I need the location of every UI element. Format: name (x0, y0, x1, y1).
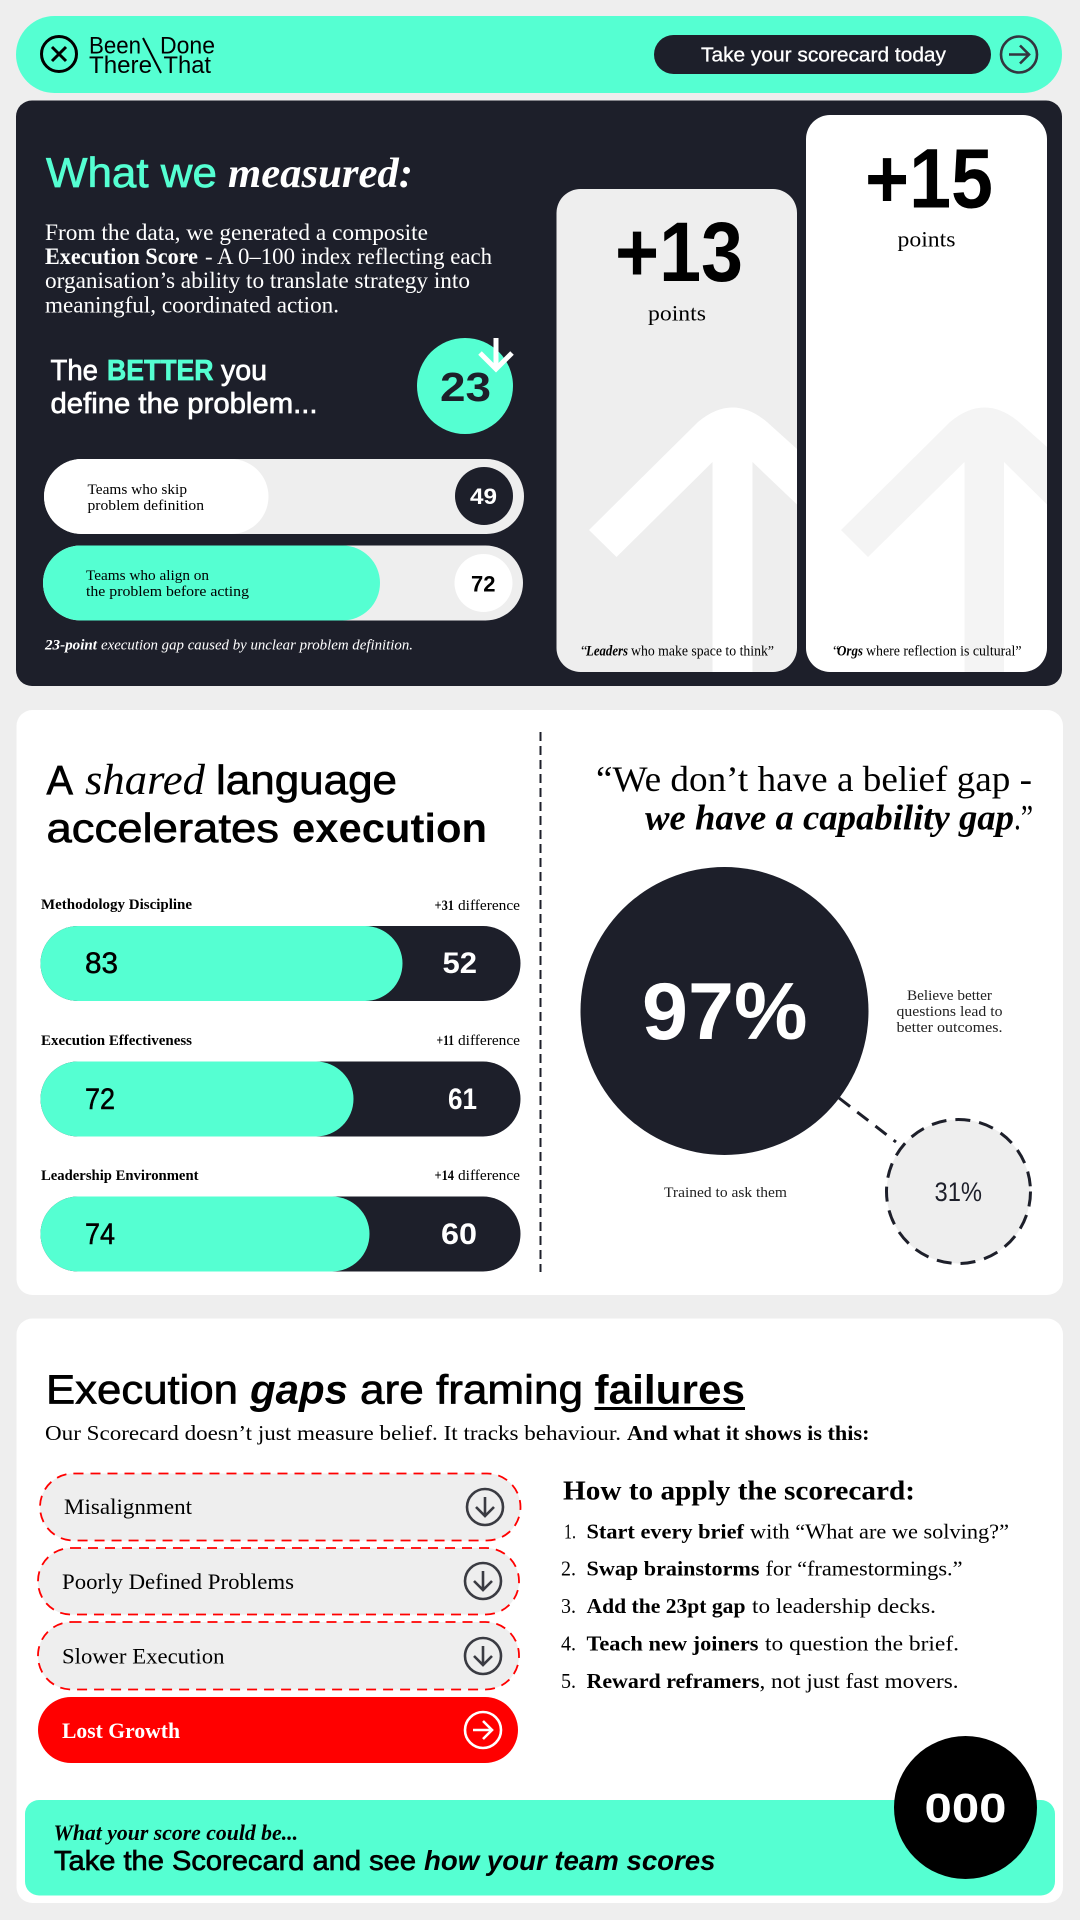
list: how to apply steps: Start every brief (586, 1520, 745, 1544)
caption: believe better questions (896, 988, 1002, 1036)
heading: execution gaps are framing failures (46, 1366, 745, 1412)
bar: teams who skip problem definition: 49 (470, 484, 497, 509)
heading: what we measured: What we (46, 149, 217, 196)
heading: how to apply the scorecard: How to apply the scorecard: (563, 1476, 915, 1506)
score badge: 000: 000 (924, 1785, 1006, 1831)
bar: teams who skip problem definition (44, 459, 524, 534)
caption: orgs: “ (833, 644, 839, 660)
logo wordmark: Been (89, 32, 141, 60)
text block: execution score description: organisation’s ability to translate strategy into (45, 268, 470, 293)
chart: leadership environment: difference (458, 1168, 520, 1184)
icon: down arrow (480, 338, 512, 369)
list: how to apply steps: , not just fast movers. (760, 1669, 958, 1693)
text block: scorecard intro (45, 1421, 870, 1445)
bar: teams who skip problem definition: Teams who skip (88, 482, 187, 498)
heading: execution gaps are framing failures: Execution (46, 1366, 238, 1412)
chart: execution effectiveness: difference (458, 1033, 520, 1049)
pill: poorly defined problems: Poorly Defined Problems (62, 1569, 294, 1594)
quote: belief gap vs capability gap: .” (1014, 798, 1033, 838)
icon: up arrow watermark (841, 408, 1047, 672)
caption: believe better questions: better outcomes. (896, 1020, 1002, 1036)
caption: leaders: Leaders (585, 644, 628, 660)
icon: logo cross circle (42, 36, 76, 72)
stat circle: 97 percent: 97% (642, 967, 808, 1057)
chart: methodology discipline: 83 (85, 947, 118, 980)
heading: a shared language accelerates execution: accelerates (46, 805, 279, 851)
logo wordmark: There (89, 52, 152, 79)
heading: a shared language accelerates execution: A (46, 757, 74, 803)
stat circle: 31 percent (886, 1120, 1030, 1264)
text block: execution score description: From the data, we generated a composite (45, 220, 428, 245)
card: leaders plus 13 points (556, 189, 797, 672)
pill: slower execution: Slower Execution (62, 1644, 225, 1668)
icon: right arrow circle (465, 1712, 501, 1748)
panel: what we measured (16, 100, 1062, 686)
pill: misalignment: Misalignment (64, 1494, 192, 1519)
list: how to apply steps: Teach new joiners (586, 1632, 758, 1656)
button: take your scorecard (654, 35, 991, 74)
icon: header arrow (1001, 36, 1037, 72)
list: how to apply steps: Add the 23pt gap (586, 1594, 746, 1618)
icon: down arrow circle (465, 1563, 501, 1599)
chart: execution effectiveness: Execution Effectiveness (41, 1033, 192, 1049)
caption: orgs: Orgs (837, 644, 863, 660)
subheading: the better you define the problem (50, 355, 318, 420)
bar: teams who align on the problem: the problem before acting (86, 584, 250, 600)
list: how to apply steps: for “framestormings.” (766, 1556, 962, 1580)
heading: a shared language accelerates execution: execution (292, 805, 487, 851)
quote: belief gap vs capability gap: we have a capability gap (645, 798, 1014, 838)
chart: methodology discipline: difference (458, 898, 520, 914)
header bar (16, 16, 1062, 93)
icon: down arrow circle (467, 1489, 503, 1525)
stat circle: 31 percent: 31% (934, 1177, 982, 1207)
heading: what we measured: measured: (228, 151, 413, 197)
stat circle: 97 percent (580, 867, 868, 1155)
subheading: the better you define the problem: you (221, 355, 267, 387)
card: orgs plus 15 points: +15 (865, 132, 993, 226)
list: how to apply steps: to question the brief. (765, 1632, 959, 1656)
caption: orgs: where reflection is cultural” (866, 644, 1022, 660)
list: how to apply steps: Swap brainstorms (586, 1556, 760, 1580)
call to action band: What your score could be... (54, 1820, 298, 1845)
quote: belief gap vs capability gap: “We don’t have a belief gap - (596, 759, 1032, 799)
list: how to apply steps: 1. (564, 1520, 576, 1544)
text block: execution score description: Execution Score (45, 244, 198, 269)
pill: slower execution (38, 1622, 519, 1690)
list: how to apply steps (561, 1520, 1009, 1693)
bar: teams who skip problem definition: problem definition (88, 498, 205, 514)
chart: execution effectiveness: 72 (85, 1083, 115, 1116)
logo wordmark: That (164, 52, 211, 79)
pill: lost growth: Lost Growth (62, 1718, 180, 1743)
pill: poorly defined problems (38, 1548, 519, 1614)
call to action band: how your team scores (424, 1845, 716, 1876)
connector line (839, 1098, 896, 1142)
quote: belief gap vs capability gap (596, 759, 1033, 838)
list: how to apply steps: 2. (561, 1556, 576, 1580)
pill: misalignment (40, 1474, 520, 1540)
text block: execution score description: - A 0–100 index reflecting each (205, 244, 492, 269)
chart: execution effectiveness: +11 (436, 1033, 454, 1049)
subheading: the better you define the problem: define the problem... (50, 388, 318, 420)
card: orgs plus 15 points (806, 115, 1047, 672)
icon: up arrow watermark (589, 408, 797, 672)
heading: what we measured (46, 149, 413, 197)
panel: execution gaps (16, 1318, 1063, 1903)
list: how to apply steps: 5. (561, 1669, 576, 1693)
bar: teams who align on the problem: 72 (471, 572, 496, 596)
caption: believe better questions: Believe better (907, 988, 992, 1004)
caption: believe better questions: questions lead to (896, 1004, 1002, 1020)
text block: scorecard intro: And what it shows is this: (627, 1421, 870, 1445)
logo wordmark (89, 32, 215, 79)
card: orgs plus 15 points: points (898, 226, 956, 252)
list: how to apply steps: Reward reframers (586, 1669, 760, 1693)
chart: execution effectiveness (40, 1033, 520, 1136)
logo wordmark: Done (160, 32, 215, 60)
call to action band: Take the Scorecard and see (54, 1845, 416, 1876)
chart: methodology discipline (40, 897, 520, 1001)
list: how to apply steps: 4. (561, 1632, 576, 1656)
chart: methodology discipline: Methodology Discipline (41, 897, 193, 913)
panel: shared language (16, 710, 1063, 1295)
pill: lost growth (38, 1697, 518, 1763)
chart: leadership environment: Leadership Environment (41, 1168, 199, 1184)
subheading: the better you define the problem: BETTER (107, 355, 214, 387)
bar: teams who align on the problem: Teams who align on (86, 568, 210, 584)
heading: a shared language accelerates execution: language (216, 757, 397, 803)
bar: teams who align on the problem (43, 546, 523, 620)
chart: execution effectiveness: 61 (448, 1083, 477, 1116)
chart: methodology discipline: +31 (434, 898, 454, 914)
heading: execution gaps are framing failures: gaps (249, 1366, 348, 1412)
heading: execution gaps are framing failures: failures (594, 1366, 745, 1412)
heading: a shared language accelerates execution (46, 757, 487, 851)
card: leaders plus 13 points: points (648, 300, 706, 326)
caption: leaders: who make space to think” (631, 644, 774, 660)
chart: leadership environment: 74 (85, 1218, 115, 1251)
badge: 23 point gap: 23 (440, 364, 491, 410)
subheading: the better you define the problem: The (50, 355, 98, 387)
list: how to apply steps: with “What are we solving?” (750, 1520, 1009, 1544)
footnote: 23 point gap: execution gap caused by unclear problem definition. (101, 638, 413, 654)
caption: leaders: “ (581, 644, 587, 660)
score badge: 000 (894, 1736, 1037, 1879)
badge: 23 point gap (417, 338, 513, 434)
list: how to apply steps: 3. (561, 1594, 576, 1618)
chart: leadership environment: 60 (441, 1218, 477, 1251)
text block: execution score description (45, 220, 492, 318)
chart: leadership environment: +14 (434, 1168, 454, 1184)
call to action band (25, 1800, 1055, 1896)
footnote: 23 point gap: 23-point (44, 638, 98, 654)
chart: methodology discipline: 52 (442, 947, 477, 980)
heading: a shared language accelerates execution: shared (85, 757, 206, 804)
icon: down arrow circle (465, 1638, 501, 1674)
card: leaders plus 13 points: +13 (615, 205, 743, 299)
text block: execution score description: meaningful, coordinated action. (45, 292, 339, 318)
chart: leadership environment (40, 1168, 520, 1272)
list: how to apply steps: to leadership decks. (752, 1594, 936, 1618)
text block: scorecard intro: Our Scorecard doesn’t just measure belief. It tracks behaviour. (45, 1421, 621, 1445)
button: take your scorecard: Take your scorecard today (701, 44, 946, 66)
heading: execution gaps are framing failures: are framing (360, 1366, 583, 1412)
caption: trained to ask them: Trained to ask them (664, 1185, 788, 1201)
